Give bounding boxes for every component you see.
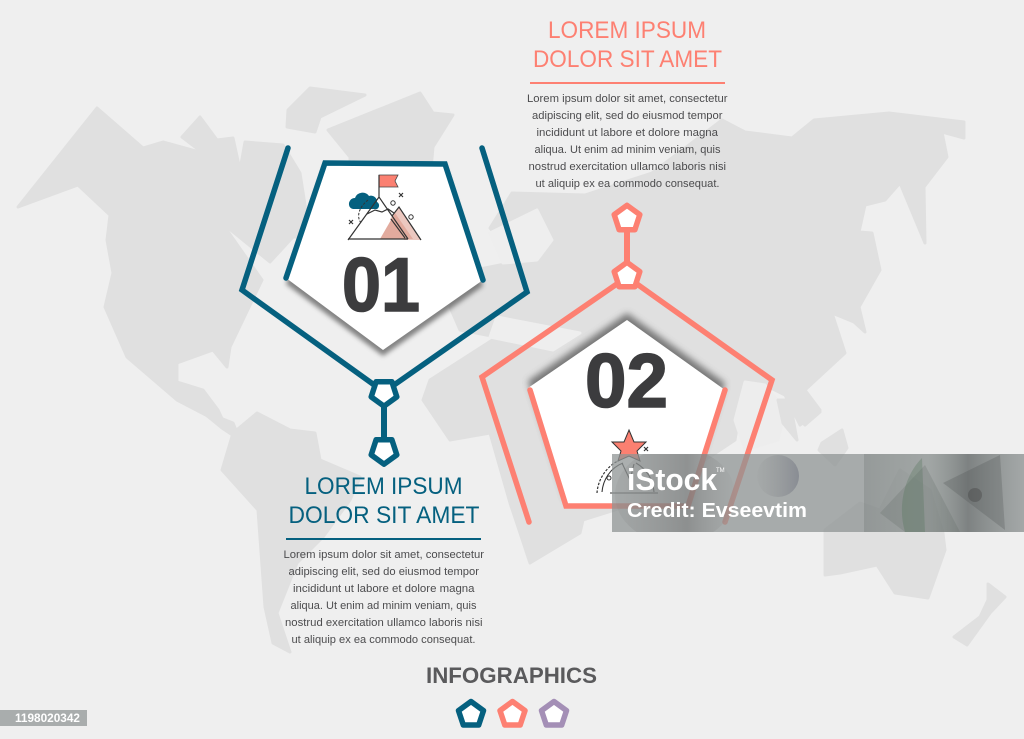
body text: step 01: aliqua. Ut enim ad minim veniam, quis <box>290 600 477 612</box>
watermark credit: Credit: Evseevtim <box>627 500 807 522</box>
heading: step 01 <box>288 473 480 529</box>
body text: step 02: ut aliquip ex ea commodo consequat. <box>536 178 720 190</box>
body text: step 02: incididunt ut labore et dolore magna <box>536 127 719 139</box>
outer teal outline 01 <box>242 148 527 392</box>
panel: step 02 <box>482 205 772 522</box>
map: sea patch north <box>490 210 552 263</box>
map: mediterranean patch <box>490 317 580 350</box>
watermark background <box>612 454 1024 532</box>
world map <box>18 88 1005 652</box>
map: indian ocean patch <box>735 382 785 450</box>
heading rule: step 02 <box>530 82 725 84</box>
legend pentagons <box>458 702 566 725</box>
heading: step 01: LOREM IPSUM <box>304 473 462 500</box>
node: upper coral pentagon <box>614 205 640 230</box>
shadow above white pentagon 02 <box>528 313 725 500</box>
image id tag <box>0 710 87 726</box>
body text: step 02 <box>527 93 728 190</box>
map: south america <box>222 413 360 652</box>
body text: step 01: Lorem ipsum dolor sit amet, consectetur <box>284 549 484 561</box>
body text: step 02: nostrud exercitation ullamco laboris nisi <box>528 161 726 173</box>
watermark brand: iStock <box>627 462 718 497</box>
heading: step 02 <box>533 17 722 73</box>
body text: step 01: ut aliquip ex ea commodo consequat. <box>292 634 476 646</box>
watermark band <box>612 454 1024 532</box>
legend: coral pentagon <box>500 702 525 725</box>
node: lower coral pentagon <box>614 262 640 287</box>
panel: step 01 <box>242 148 527 464</box>
number 02: 02 <box>585 339 668 424</box>
watermark trademark: TM <box>716 468 725 474</box>
text block: step 02 <box>527 17 728 190</box>
id tag text: 1198020342 <box>15 711 80 725</box>
icon: star over hill <box>597 430 658 493</box>
shadow under white pentagon 01 <box>286 168 483 356</box>
outer coral outline 02 <box>482 277 772 522</box>
map: island south <box>819 430 847 465</box>
inner teal outline 01 <box>286 163 483 280</box>
map: arctic island <box>328 93 453 180</box>
map: central america strip <box>200 410 240 440</box>
map: island north <box>778 400 820 440</box>
map: greenland <box>287 88 365 132</box>
map: north america <box>18 108 310 425</box>
heading: step 02: DOLOR SIT AMET <box>533 46 722 73</box>
white pentagon 01 <box>286 163 483 350</box>
map: eurasia and africa <box>423 113 964 563</box>
heading: step 01: DOLOR SIT AMET <box>288 502 480 529</box>
node: upper teal pentagon <box>371 382 397 406</box>
body text: step 01 <box>284 549 484 646</box>
heading: step 02: LOREM IPSUM <box>548 17 706 44</box>
white pentagon 02 <box>528 320 725 506</box>
inner coral outline 02 <box>530 390 725 506</box>
connector line 02 <box>624 228 630 265</box>
body text: step 02: Lorem ipsum dolor sit amet, consectetur <box>527 93 728 105</box>
body text: step 01: nostrud exercitation ullamco laboris nisi <box>285 617 482 629</box>
watermark decorative shapes <box>625 454 1016 532</box>
connector line 01 <box>381 405 387 442</box>
body text: step 01: adipiscing elit, sed do eiusmod tempor <box>288 566 479 578</box>
id tag background <box>0 710 87 726</box>
text block: step 01 <box>284 473 484 646</box>
number 01: 01 <box>342 243 420 328</box>
heading rule: step 01 <box>286 538 481 540</box>
title: infographics: INFOGRAPHICS <box>426 663 597 688</box>
legend: purple pentagon <box>542 702 566 725</box>
map: australia <box>825 470 945 598</box>
body text: step 02: adipiscing elit, sed do eiusmod tempor <box>532 110 723 122</box>
node: lower teal pentagon <box>371 440 397 464</box>
body text: step 01: incididunt ut labore et dolore magna <box>293 583 475 595</box>
icon: mountain with flag <box>348 175 421 240</box>
body text: step 02: aliqua. Ut enim ad minim veniam, quis <box>534 144 721 156</box>
map: new zealand <box>954 584 1005 645</box>
legend: teal pentagon <box>458 702 484 725</box>
